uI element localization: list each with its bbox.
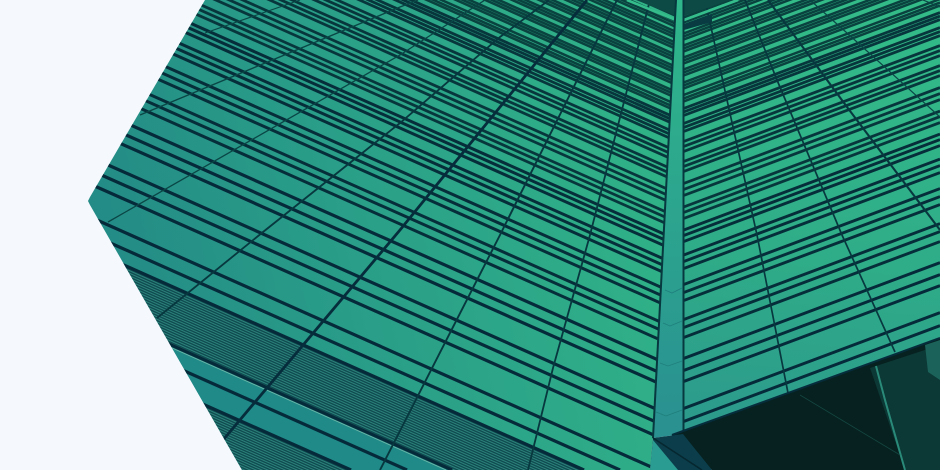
top corner band	[684, 0, 730, 16]
corner column	[653, 0, 684, 438]
right facade mullions	[705, 0, 940, 393]
right facade	[683, 0, 940, 440]
top corner band	[636, 0, 675, 14]
floor lines	[683, 0, 940, 436]
hatched panels and floor lines	[80, 0, 680, 470]
dark glass base	[650, 338, 940, 470]
left facade mullions	[108, 0, 650, 470]
left facade	[80, 0, 690, 470]
